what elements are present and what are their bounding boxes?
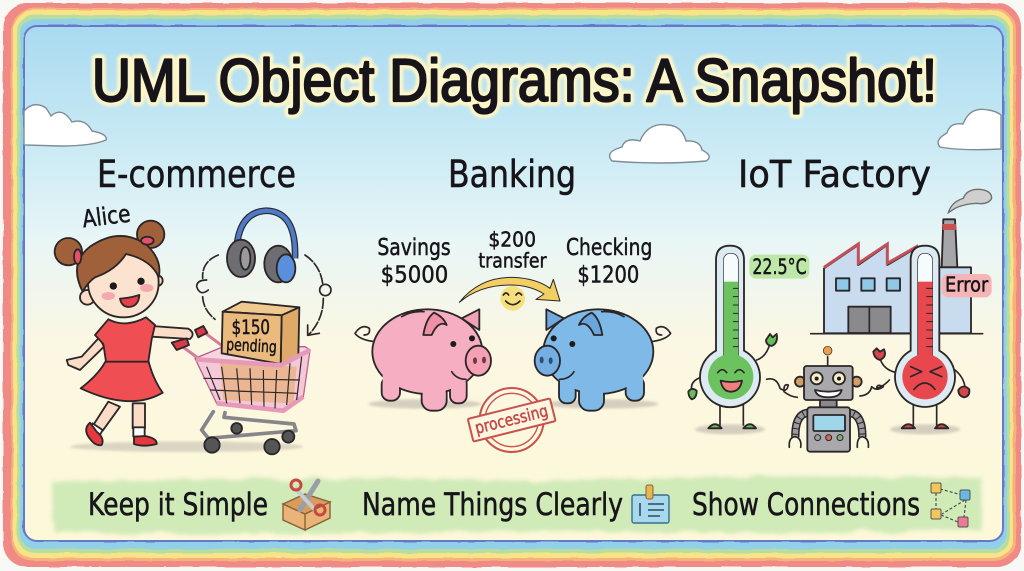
scene: banking: [355, 228, 671, 452]
label: transfer: transfer: [478, 249, 547, 273]
dashed flow arrow: [197, 255, 331, 335]
title: UML Object Diagrams: A Snapshot!: [92, 47, 937, 114]
label: checking: Checking: [566, 235, 652, 261]
cloud right: [938, 109, 1001, 150]
tip: keep it simple: Keep it Simple: [88, 487, 268, 523]
thermometer: green: [688, 246, 777, 428]
piggy bank: pink: [355, 309, 491, 411]
thermometer: red: [873, 246, 969, 428]
shadows: [368, 399, 482, 409]
heading: banking: Banking: [448, 153, 576, 196]
label: savings: Savings: [377, 235, 451, 261]
stamp: processing: [468, 388, 556, 452]
label: transfer amount: $200: [488, 228, 536, 252]
shadow right: [545, 399, 658, 409]
heading: e-commerce: E-commerce: [97, 153, 296, 196]
shadow right: [890, 424, 960, 434]
parcel text: price: $150: [232, 316, 270, 339]
label: savings amount: $5000: [381, 263, 448, 289]
girl Alice: [55, 221, 193, 446]
arrow: transfer: [459, 277, 560, 302]
parcel text: status: pending: [226, 335, 277, 357]
icon: box and scissors: [283, 480, 330, 530]
scene: iot factory: [688, 189, 992, 452]
icon: name note: [632, 485, 669, 523]
robot: [767, 346, 889, 452]
cart basket front: [196, 350, 310, 411]
heading: iot factory: IoT Factory: [738, 153, 931, 196]
icon: connected nodes: [931, 483, 970, 527]
ground shadow: [70, 441, 303, 452]
tip: show connections: Show Connections: [692, 487, 920, 523]
piggy bank: blue: [535, 309, 671, 411]
label: checking amount: $1200: [577, 263, 639, 289]
parcel box: [222, 302, 299, 364]
label: Alice: Alice: [81, 200, 132, 233]
factory: [811, 219, 983, 334]
tips band: [52, 477, 982, 534]
icon: smiley: [500, 286, 525, 311]
stamp: processing: processing: [473, 401, 550, 438]
cloud left: [24, 105, 106, 146]
cloud centre: [610, 125, 709, 163]
shopping cart: [172, 326, 310, 454]
headphones: [227, 211, 295, 282]
scene: e-commerce: [55, 200, 331, 454]
smoke: [948, 189, 992, 213]
alert: error: Error: [945, 273, 989, 297]
reading: 22.5 C: 22.5°C: [752, 255, 807, 280]
thermometer shadows: [695, 424, 765, 434]
title: UML Object Diagrams: A Snapshot!: [92, 47, 937, 114]
tip: name things clearly: Name Things Clearly: [362, 487, 623, 523]
